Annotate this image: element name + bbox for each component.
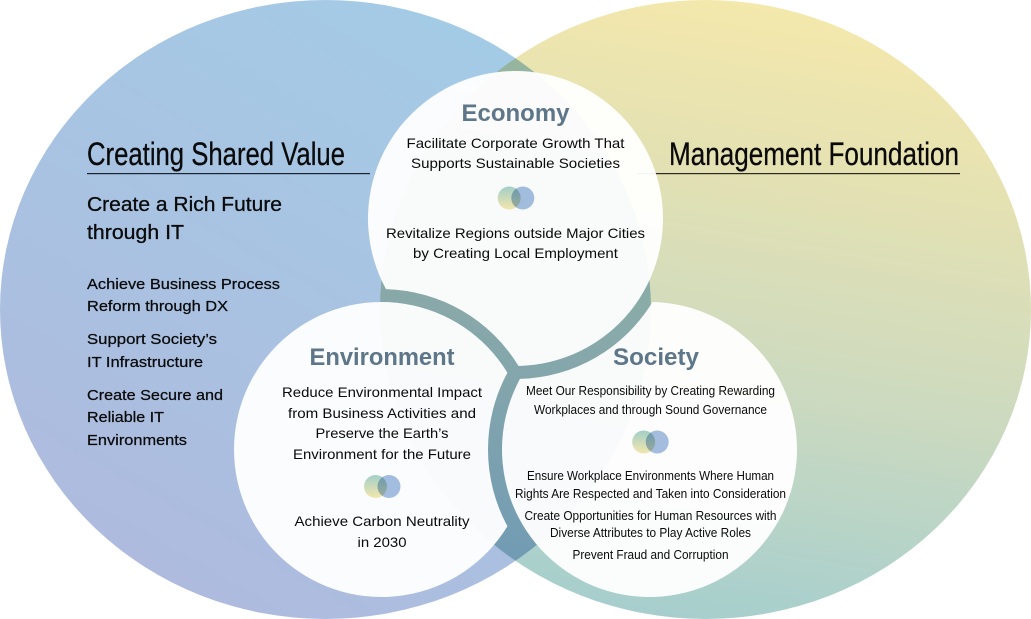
- right heading underline: [637, 173, 960, 174]
- icon: overlapping circles: [632, 430, 669, 454]
- panel: Economy: [386, 100, 645, 261]
- text: Economy item 2: [386, 225, 645, 261]
- text block: value creation list: Environments: [87, 432, 187, 449]
- text: Society item 3: Create Opportunities for Human Resources with: [524, 508, 776, 523]
- panel: Society: [515, 344, 786, 562]
- icon: overlapping circles: [364, 475, 400, 498]
- text: Economy item 2: by Creating Local Employment: [413, 245, 618, 261]
- panel: Environment: [282, 344, 482, 550]
- text: Society item 1: Workplaces and through Sound Governance: [534, 402, 767, 417]
- ellipse: Management Foundation: [380, 0, 1031, 619]
- text: Society item 1: [526, 383, 775, 417]
- text: Environment item 1: from Business Activities and: [288, 405, 476, 421]
- text block: value creation list: Support Society’s: [87, 331, 217, 348]
- text block: value creation list: Create Secure and: [87, 387, 223, 404]
- text: Society item 2: Rights Are Respected and Taken into Consideration: [515, 486, 786, 501]
- text: Economy item 1: [406, 135, 625, 171]
- text: Environment item 1: Environment for the Future: [293, 446, 471, 462]
- left heading underline: [87, 173, 370, 174]
- heading: Environment: Environment: [310, 344, 455, 371]
- text: Society item 2: [515, 468, 786, 501]
- text block: value creation list: Reform through DX: [87, 298, 228, 315]
- text: Society item 1: Meet Our Responsibility by Creating Rewarding: [526, 383, 775, 398]
- heading: Management Foundation: Management Foundation: [669, 136, 959, 172]
- heading: Society: Society: [613, 344, 700, 371]
- text: Society item 3: Diverse Attributes to Play Active Roles: [550, 525, 751, 540]
- text block: value creation list: Reliable IT: [87, 409, 164, 426]
- text: Environment item 1: [282, 384, 482, 462]
- text: Environment item 1: Preserve the Earth’s: [316, 425, 448, 441]
- white segment: Economy: [368, 71, 663, 366]
- text block: Create a Rich Future through IT: Create a Rich Future: [87, 194, 282, 216]
- text: Environment item 2: in 2030: [358, 534, 407, 550]
- text: Environment item 2: Achieve Carbon Neutrality: [294, 513, 470, 529]
- ellipse: Creating Shared Value: [0, 0, 651, 619]
- text block: value creation list: [87, 276, 280, 449]
- text: Economy item 1: Facilitate Corporate Growth That: [406, 135, 625, 151]
- text: Environment item 1: Reduce Environmental Impact: [282, 384, 482, 400]
- text: Society item 3: [524, 508, 776, 540]
- text: Economy item 2: Revitalize Regions outside Major Cities: [386, 225, 645, 241]
- icon: overlapping circles: [498, 186, 534, 210]
- text block: Create a Rich Future through IT: through IT: [87, 222, 184, 244]
- text block: Create a Rich Future through IT: [87, 194, 282, 244]
- text: Economy item 1: Supports Sustainable Societies: [411, 155, 620, 171]
- text block: value creation list: Achieve Business Process: [87, 276, 280, 293]
- text: Environment item 2: [294, 513, 470, 550]
- white segment: Society: [502, 302, 797, 597]
- heading: Economy: Economy: [462, 100, 570, 127]
- text block: value creation list: IT Infrastructure: [87, 354, 203, 371]
- text: Society item 2: Ensure Workplace Environments Where Human: [527, 468, 774, 483]
- white segment: Environment: [234, 302, 507, 597]
- heading: Creating Shared Value: Creating Shared Value: [87, 136, 345, 172]
- text: Society item 4: Prevent Fraud and Corruption: [572, 547, 728, 562]
